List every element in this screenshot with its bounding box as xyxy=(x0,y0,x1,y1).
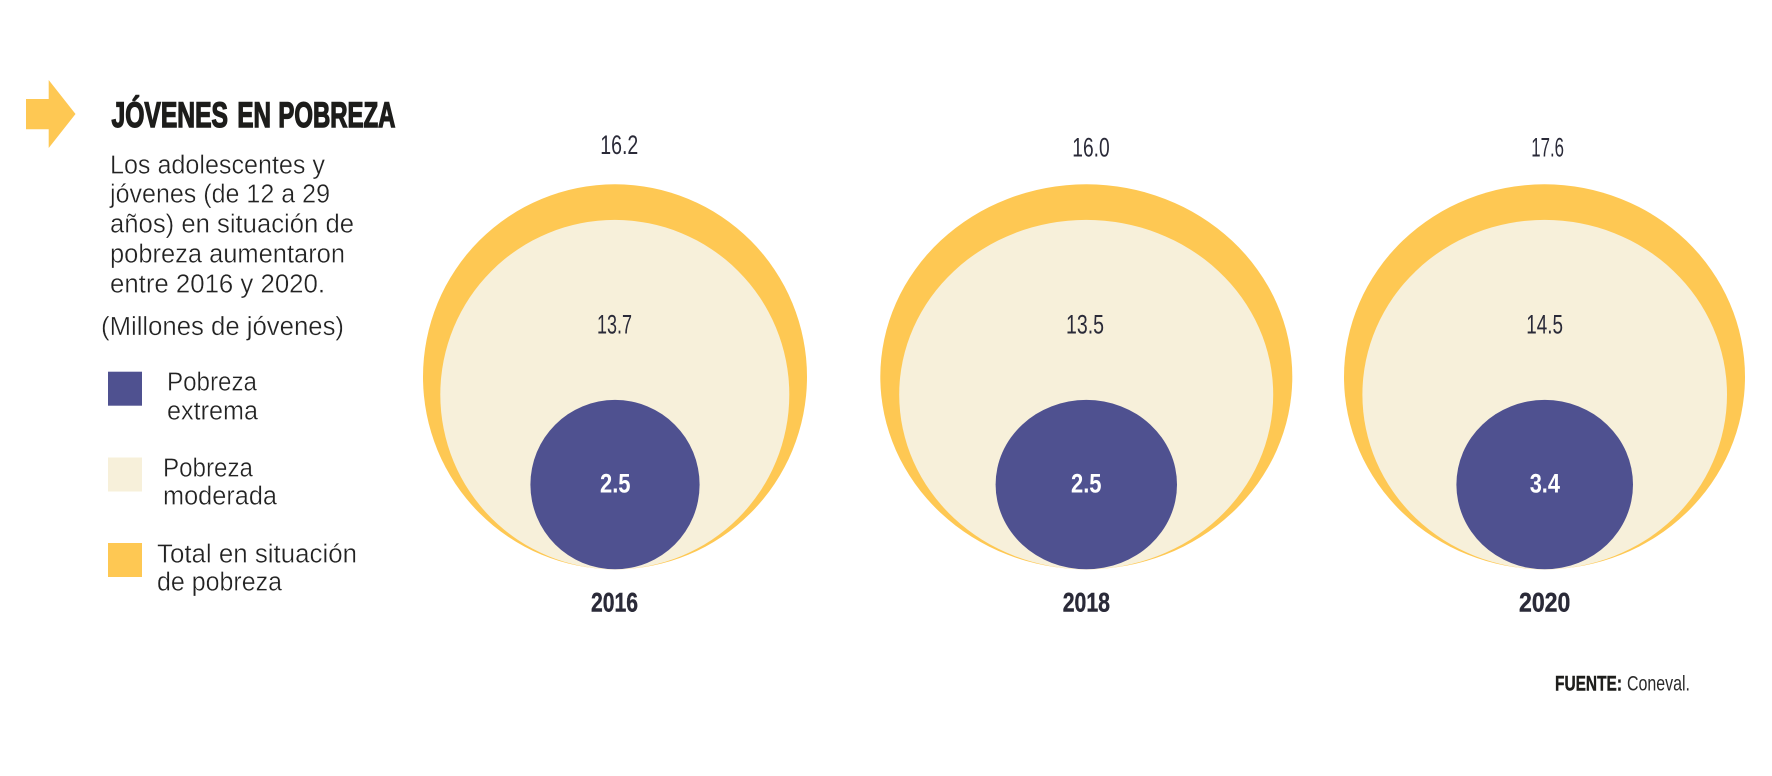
chart: 2018 xyxy=(880,133,1292,618)
legend item: pobreza extrema xyxy=(108,369,259,425)
chart: 2018: 2018 xyxy=(1063,588,1110,618)
text block: intro xyxy=(109,151,354,299)
chart: 2018: 16.0 xyxy=(1072,133,1110,163)
legend xyxy=(108,369,357,597)
source: Coneval. xyxy=(1627,673,1690,696)
legend item: total: Total en situación xyxy=(157,541,357,569)
chart: 2016 xyxy=(423,130,807,618)
legend item: pobreza extrema: extrema xyxy=(167,397,259,425)
chart: 2018: 2.5 xyxy=(1071,468,1102,498)
title xyxy=(112,95,395,135)
source: FUENTE: xyxy=(1555,673,1622,696)
legend item: pobreza extrema: Pobreza xyxy=(167,369,258,397)
chart: 2018: 13.5 xyxy=(1066,309,1104,339)
chart: 2020: 17.6 xyxy=(1531,133,1564,163)
icon: arrow xyxy=(26,80,76,148)
chart: 2016: 16.2 xyxy=(600,130,638,160)
chart: 2020 xyxy=(1344,133,1745,618)
chart: 2016: 13.7 xyxy=(597,309,632,339)
text block: intro: Los adolescentes y xyxy=(110,151,325,179)
legend item: total xyxy=(108,541,357,597)
legend item: pobreza moderada xyxy=(108,455,278,510)
unit note: (Millones de jóvenes) xyxy=(101,313,344,341)
source xyxy=(1555,673,1690,696)
title: EN xyxy=(237,95,271,135)
chart: 2016: 2.5 xyxy=(600,468,630,498)
text block: intro: pobreza aumentaron xyxy=(110,241,345,269)
title: POBREZA xyxy=(278,95,395,135)
legend item: pobreza moderada: Pobreza xyxy=(163,455,254,483)
chart: 2020: 2020 xyxy=(1519,588,1570,618)
legend item: pobreza moderada: moderada xyxy=(163,482,278,510)
legend item: total: de pobreza xyxy=(157,569,283,597)
text block: intro: años) en situación de xyxy=(110,211,354,239)
chart: 2016: 2016 xyxy=(591,588,638,618)
text block: intro: jóvenes (de 12 a 29 xyxy=(109,181,330,209)
chart: 2020: 3.4 xyxy=(1530,468,1560,498)
chart: 2020: 14.5 xyxy=(1526,309,1563,339)
text block: intro: entre 2016 y 2020. xyxy=(110,271,325,299)
title: JÓVENES xyxy=(112,95,228,135)
